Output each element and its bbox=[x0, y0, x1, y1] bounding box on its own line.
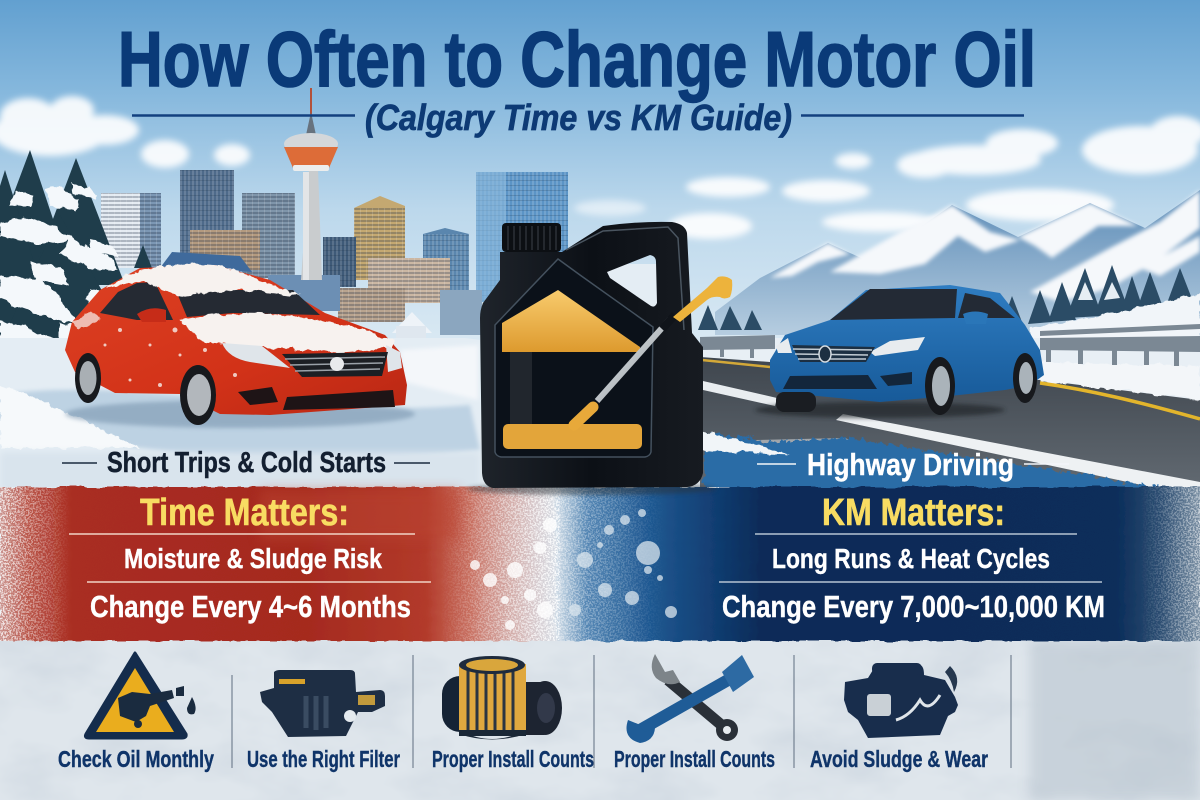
heading: time matters: Time Matters: bbox=[140, 492, 349, 534]
label: Proper Install Counts bbox=[432, 746, 594, 772]
snow covered trees bbox=[0, 150, 152, 345]
snow dust on side bbox=[104, 328, 237, 387]
distant trees and snow hill bbox=[698, 265, 1200, 345]
grille bbox=[792, 345, 875, 362]
jug label outline bbox=[495, 259, 653, 457]
text: moisture and sludge: Moisture & Sludge Risk bbox=[124, 543, 382, 574]
tip: proper install counts tools bbox=[614, 654, 775, 772]
panel: km matters bbox=[555, 447, 1200, 641]
subheading: short trips: Short Trips & Cold Starts bbox=[107, 447, 386, 479]
car grille bbox=[282, 352, 388, 377]
wheels bbox=[75, 353, 101, 403]
tip: use the right filter bbox=[247, 670, 400, 772]
text: change every km: Change Every 7,000~10,000 KM bbox=[722, 589, 1105, 624]
label: Avoid Sludge & Wear bbox=[810, 746, 988, 772]
panel: time matters bbox=[0, 447, 740, 641]
car windows bbox=[100, 282, 320, 320]
icon: Calgary Tower bbox=[284, 88, 338, 280]
blue band splatter bbox=[569, 509, 677, 618]
snowy ground bbox=[0, 338, 1180, 492]
lower grille bbox=[238, 387, 395, 410]
icon: warning triangle oil bbox=[85, 653, 196, 738]
headlights bbox=[776, 337, 925, 356]
heading: km matters: KM Matters: bbox=[822, 492, 1005, 534]
icon: motor oil jug bbox=[467, 222, 732, 495]
panel: bottom tips background bbox=[0, 640, 1200, 800]
mountains bbox=[715, 190, 1200, 335]
label: Use the Right Filter bbox=[247, 746, 400, 772]
roof and hood snow bbox=[70, 264, 392, 352]
car headlights bbox=[222, 343, 402, 372]
guardrail bbox=[700, 324, 1200, 366]
lower grille bbox=[783, 372, 912, 389]
subheading: highway driving: Highway Driving bbox=[807, 447, 1014, 482]
icon: oil filter bbox=[442, 656, 562, 740]
subtitle: (Calgary Time vs KM Guide) bbox=[365, 97, 792, 138]
jug cap bbox=[502, 223, 561, 252]
car mirror bbox=[137, 308, 166, 322]
jug gold panel top bbox=[502, 290, 640, 352]
icon: filter housing bbox=[260, 670, 385, 737]
clouds bbox=[0, 96, 1200, 239]
tip: proper install counts oil filter bbox=[432, 656, 594, 772]
blue car bbox=[755, 285, 1044, 418]
icon: crossed wrench and screwdriver bbox=[626, 654, 754, 743]
text: long runs: Long Runs & Heat Cycles bbox=[772, 543, 1050, 574]
wheels bbox=[776, 392, 816, 412]
icon: engine bbox=[844, 663, 958, 738]
windshield and side windows bbox=[830, 289, 1015, 320]
label: Proper Install Counts bbox=[614, 746, 775, 772]
red car bbox=[65, 264, 415, 428]
label: Check Oil Monthly bbox=[58, 746, 214, 772]
road bbox=[700, 338, 1200, 492]
skyline: Calgary buildings bbox=[101, 170, 657, 338]
sky background bbox=[0, 0, 1200, 420]
dipstick bbox=[574, 276, 732, 425]
tip: avoid sludge and wear bbox=[810, 663, 988, 772]
text: change every 4-6 months: Change Every 4~6 Months bbox=[90, 589, 411, 624]
jug gold panel bottom bbox=[503, 424, 642, 449]
red band splatter bbox=[470, 518, 557, 630]
side mirror bbox=[963, 312, 988, 324]
tip: check oil monthly bbox=[58, 653, 214, 772]
